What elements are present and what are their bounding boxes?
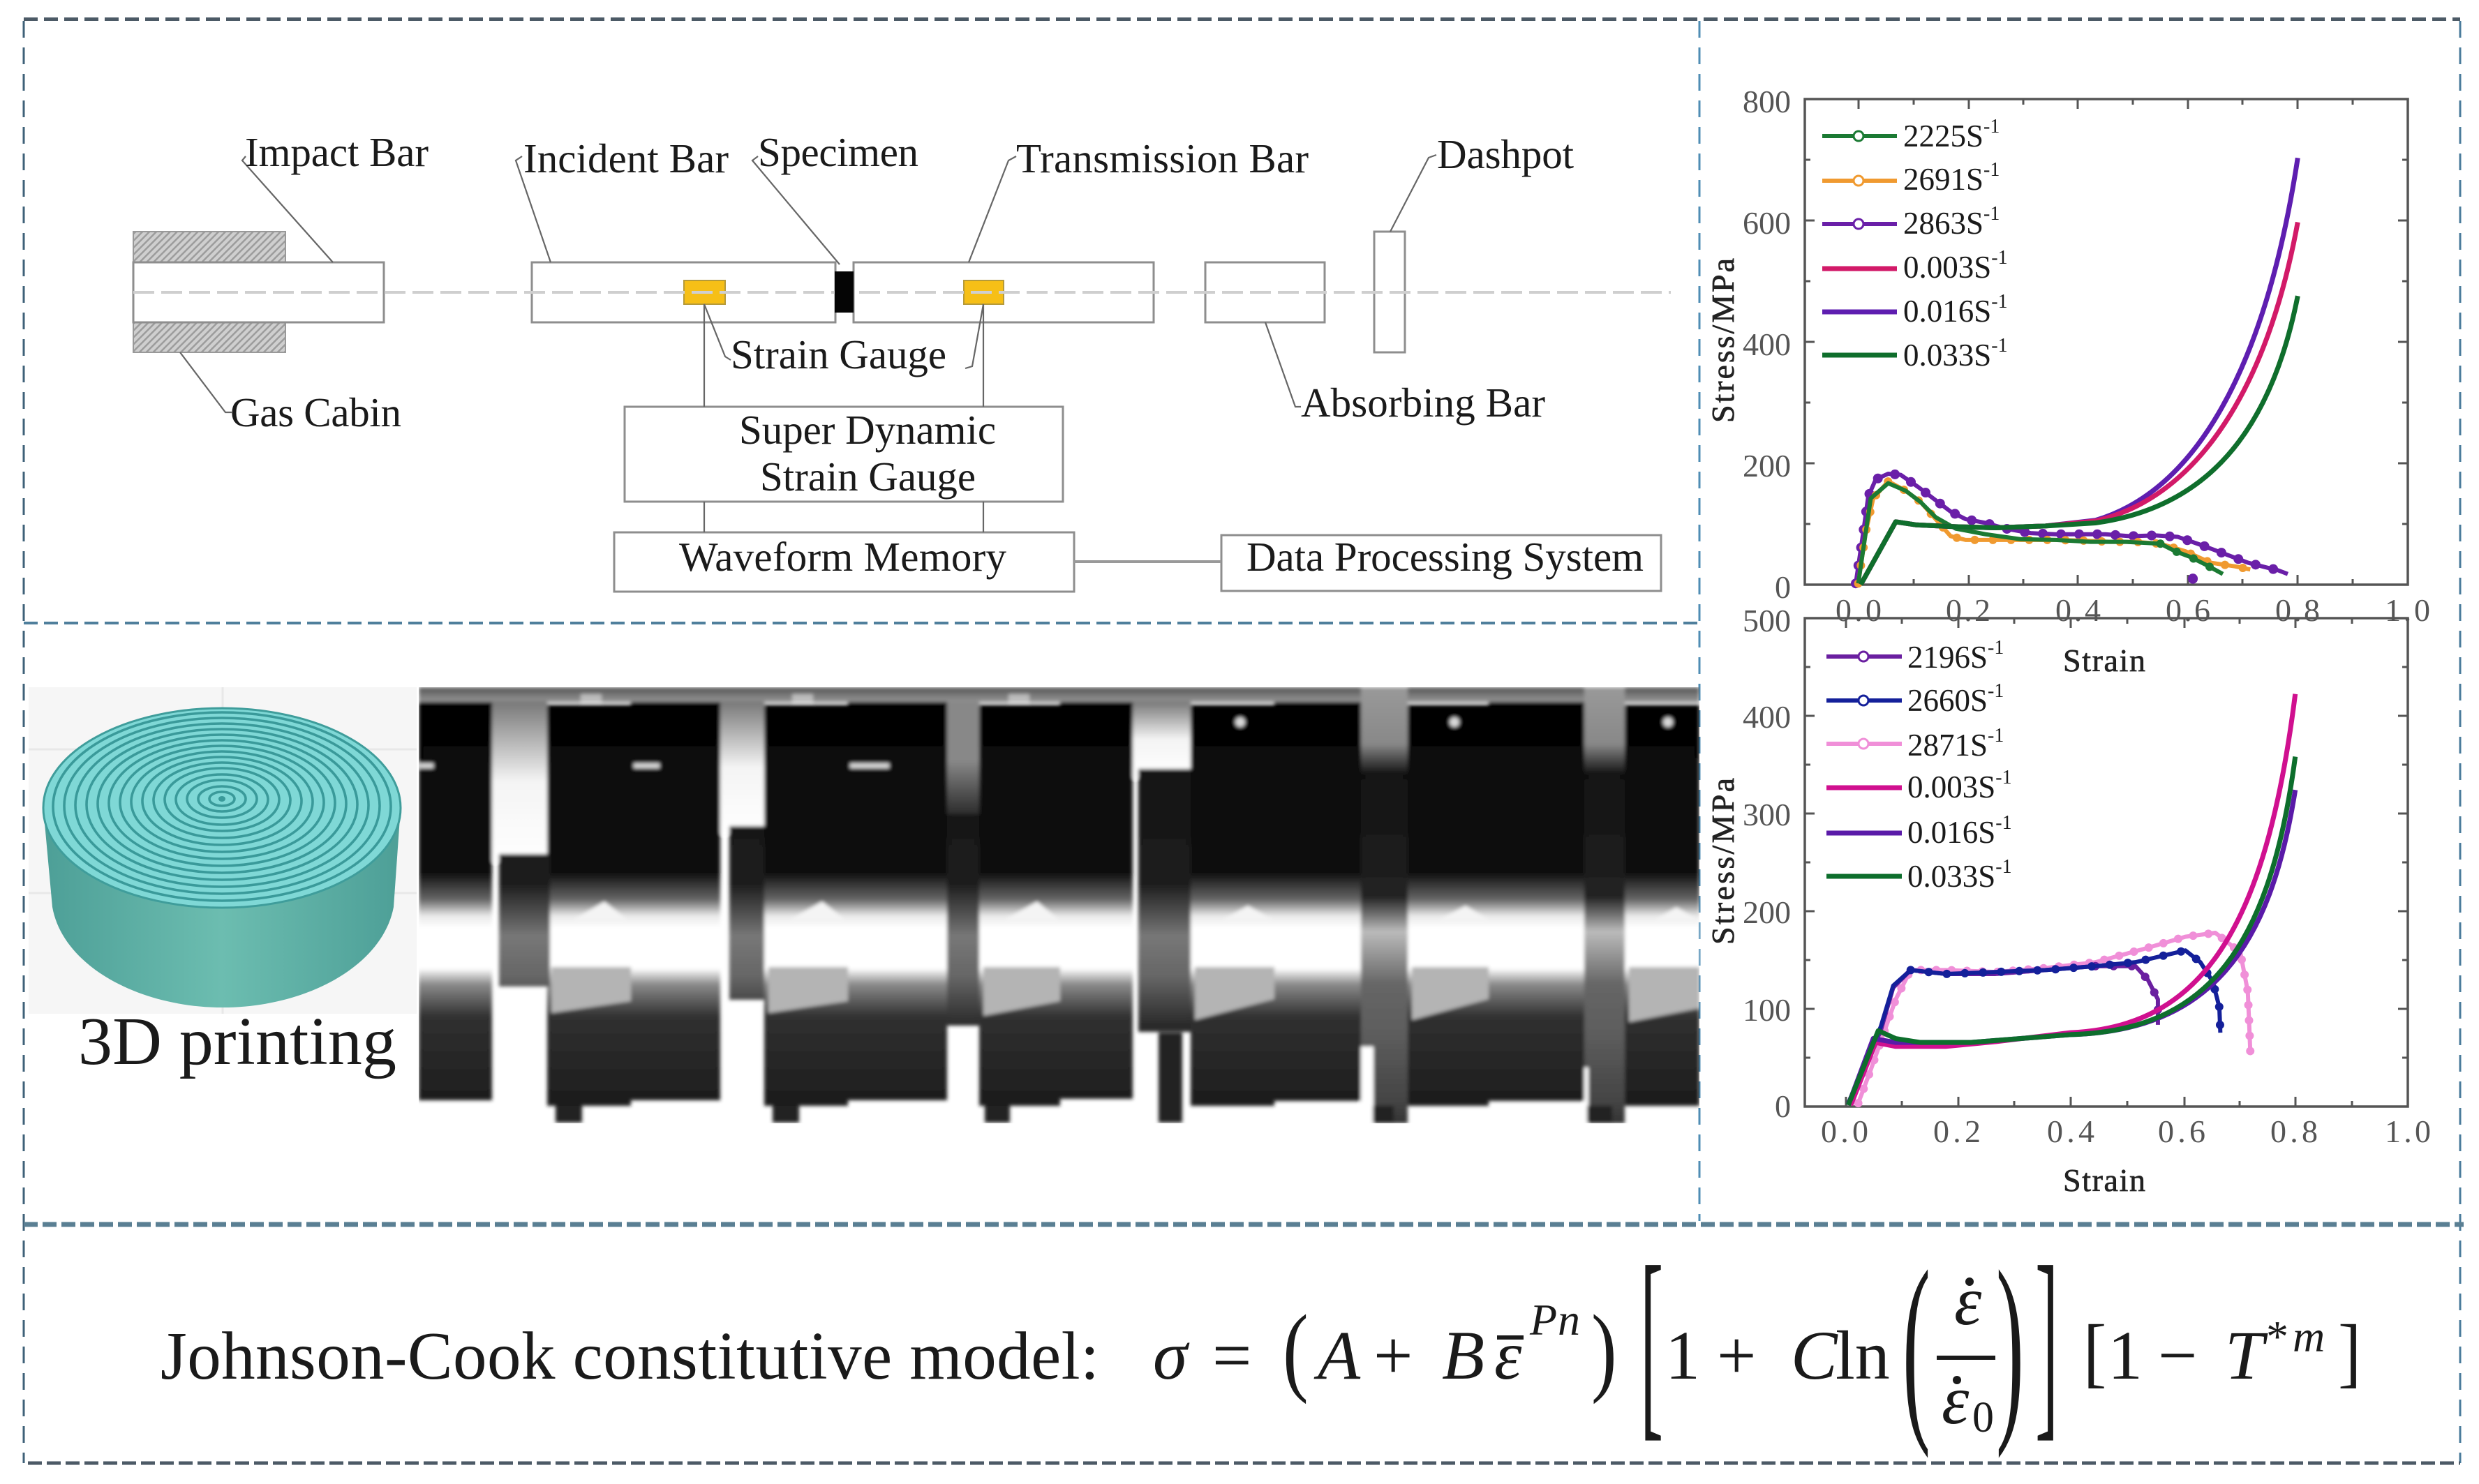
labels: Dashpot	[1437, 131, 1574, 177]
icon: gas cabin	[133, 232, 285, 352]
y tick labels: 600	[1743, 205, 1791, 241]
equation: Johnson-Cook constitutive model: n	[1558, 1295, 1580, 1344]
labels: Strain Gauge	[731, 331, 946, 377]
equation: Johnson-Cook constitutive model: ε	[1942, 1361, 1970, 1439]
legend: -1	[1983, 203, 2000, 225]
equation: Johnson-Cook constitutive model: +	[1374, 1317, 1413, 1394]
y axis title: Stress/MPa	[1705, 258, 1741, 423]
panel: high-speed compression image sequence	[419, 687, 1699, 1123]
panel: 3D printed specimen render	[29, 687, 417, 1014]
legend: -1	[1991, 335, 2008, 357]
legend: 2196S	[1907, 640, 1988, 675]
lower bar tails	[556, 1033, 1612, 1123]
labels: Absorbing Bar	[1301, 380, 1545, 426]
labels: Transmission Bar	[1016, 135, 1309, 181]
equation: Johnson-Cook constitutive model: ε	[1954, 1262, 1982, 1340]
gaps between bars	[492, 701, 1191, 862]
equation: Johnson-Cook constitutive model: m	[2293, 1312, 2325, 1361]
x tick labels: 0.4	[2055, 592, 2101, 628]
legend: 0.033S	[1907, 859, 1995, 894]
y axis title: Stress/MPa	[1705, 778, 1741, 945]
chart: stress-strain, lower	[1705, 603, 2431, 1198]
specimen	[835, 271, 854, 313]
y tick labels	[1743, 603, 1791, 1124]
x tick labels	[1821, 1114, 2431, 1149]
legend: -1	[1988, 680, 2004, 702]
legend: 2225S	[1903, 119, 1983, 153]
y tick labels: 0	[1775, 569, 1791, 605]
equation: Johnson-Cook constitutive model: P	[1529, 1295, 1557, 1344]
labels	[230, 129, 1644, 580]
y tick labels	[1743, 84, 1791, 605]
equation: Johnson-Cook constitutive model: C	[1791, 1317, 1838, 1394]
equation: Johnson-Cook constitutive model: σ	[1153, 1317, 1190, 1394]
3D printing caption: 3D printing	[78, 1004, 396, 1079]
x tick labels	[1836, 592, 2430, 628]
legend: 0.016S	[1903, 294, 1991, 329]
y tick labels: 500	[1743, 603, 1791, 638]
labels: Waveform Memory	[679, 534, 1006, 580]
plot frame and ticks	[1805, 618, 2408, 1107]
legend: 2660S	[1907, 683, 1988, 718]
x tick labels: 0.8	[2270, 1114, 2318, 1149]
textured reflection patches	[551, 967, 1699, 1022]
y tick labels: 100	[1743, 992, 1791, 1028]
x tick labels: 0.2	[1933, 1114, 1981, 1149]
equation: Johnson-Cook constitutive model: *	[2264, 1312, 2286, 1361]
legend: 2871S	[1907, 728, 1988, 763]
highlight peaks	[572, 901, 1699, 920]
labels: Gas Cabin	[230, 389, 401, 435]
legend	[1822, 116, 2008, 373]
equation: Johnson-Cook constitutive model: ]	[2035, 1223, 2058, 1458]
legend: -1	[1988, 725, 2004, 747]
icon: concentric top layers	[43, 708, 401, 908]
legend: 0.033S	[1903, 338, 1991, 373]
data curves	[1848, 694, 2295, 1105]
x tick labels: 0.2	[1946, 592, 1990, 628]
x axis title: Strain	[2063, 643, 2145, 678]
legend: -1	[1995, 812, 2012, 834]
equation: Johnson-Cook constitutive model: )	[1591, 1296, 1617, 1404]
x tick labels: 1.0	[2385, 1114, 2431, 1149]
y tick labels: 800	[1743, 84, 1791, 119]
legend: -1	[1988, 637, 2004, 659]
x tick labels: 0.6	[2158, 1114, 2205, 1149]
y tick labels: 0	[1775, 1088, 1791, 1124]
equation: Johnson-Cook constitutive model: ]	[2338, 1309, 2361, 1395]
bars and instrument boxes	[133, 232, 1661, 592]
x tick labels: 0.4	[2047, 1114, 2094, 1149]
plot frame and ticks	[1805, 99, 2408, 585]
legend: -1	[1995, 767, 2012, 788]
legend: -1	[1995, 856, 2012, 878]
equation: Johnson-Cook constitutive model: −	[2158, 1317, 2197, 1394]
x axis title: Strain	[2063, 1162, 2145, 1198]
equation: Johnson-Cook constitutive model: A	[1313, 1317, 1361, 1394]
equation: Johnson-Cook constitutive model: T	[2225, 1317, 2268, 1394]
x tick labels: 0.8	[2275, 592, 2320, 628]
dark incident and transmission bars	[419, 702, 1699, 1106]
labels: Strain Gauge	[760, 454, 976, 500]
equation: Johnson-Cook constitutive model: 0	[1972, 1394, 1994, 1441]
panel: SHPB apparatus schematic	[133, 129, 1671, 592]
equation: Johnson-Cook constitutive model: )	[1996, 1229, 2024, 1460]
equation: Johnson-Cook constitutive model: 1	[2108, 1317, 2143, 1394]
deforming specimen frames	[499, 687, 1625, 1123]
labels: Specimen	[758, 129, 918, 175]
x tick labels: 0.6	[2166, 592, 2210, 628]
equation: Johnson-Cook constitutive model: ε	[1494, 1317, 1522, 1394]
leader lines and wiring	[180, 155, 1436, 562]
equation: Johnson-Cook constitutive model: =	[1212, 1317, 1251, 1394]
equation: Johnson-Cook constitutive model: [	[1640, 1223, 1663, 1458]
x tick labels: 0.0	[1821, 1114, 1868, 1149]
labels: Impact Bar	[245, 129, 429, 175]
y tick labels: 300	[1743, 797, 1791, 832]
x tick labels: 1.0	[2385, 592, 2430, 628]
labels: Incident Bar	[523, 135, 729, 181]
legend: -1	[1991, 247, 2008, 269]
x tick labels: 0.0	[1836, 592, 1882, 628]
labels: Data Processing System	[1246, 534, 1644, 580]
equation: Johnson-Cook constitutive model: ln	[1836, 1317, 1890, 1394]
legend: 0.003S	[1903, 250, 1991, 285]
legend: -1	[1983, 116, 2000, 137]
legend: -1	[1991, 291, 2008, 313]
equation: Johnson-Cook constitutive model: Johnson-Cook constitutive model:	[161, 1319, 1099, 1393]
equation: Johnson-Cook constitutive model: [	[2083, 1309, 2106, 1395]
y tick labels: 400	[1743, 327, 1791, 362]
legend	[1826, 637, 2012, 894]
equation: Johnson-Cook constitutive model: (	[1903, 1229, 1930, 1460]
y tick labels: 400	[1743, 699, 1791, 735]
labels: Super Dynamic	[739, 407, 996, 453]
equation: Johnson-Cook constitutive model: (	[1283, 1296, 1309, 1404]
y tick labels: 200	[1743, 448, 1791, 484]
data curves	[1856, 158, 2298, 585]
icon: strain gauges	[684, 280, 1004, 304]
legend: 0.016S	[1907, 815, 1995, 850]
icon: cylinder body	[43, 808, 401, 1007]
small specular marks	[419, 717, 1673, 768]
legend: 0.003S	[1907, 770, 1995, 804]
equation: Johnson-Cook constitutive model: B	[1442, 1317, 1484, 1394]
legend: -1	[1983, 159, 2000, 181]
chart: stress-strain, upper	[1705, 84, 2430, 678]
equation: Johnson-Cook constitutive model: +	[1717, 1317, 1756, 1394]
legend: 2691S	[1903, 162, 1983, 197]
y tick labels: 200	[1743, 894, 1791, 930]
legend: 2863S	[1903, 206, 1983, 241]
equation: Johnson-Cook constitutive model	[161, 1223, 2361, 1460]
equation: Johnson-Cook constitutive model: 1	[1665, 1317, 1700, 1394]
